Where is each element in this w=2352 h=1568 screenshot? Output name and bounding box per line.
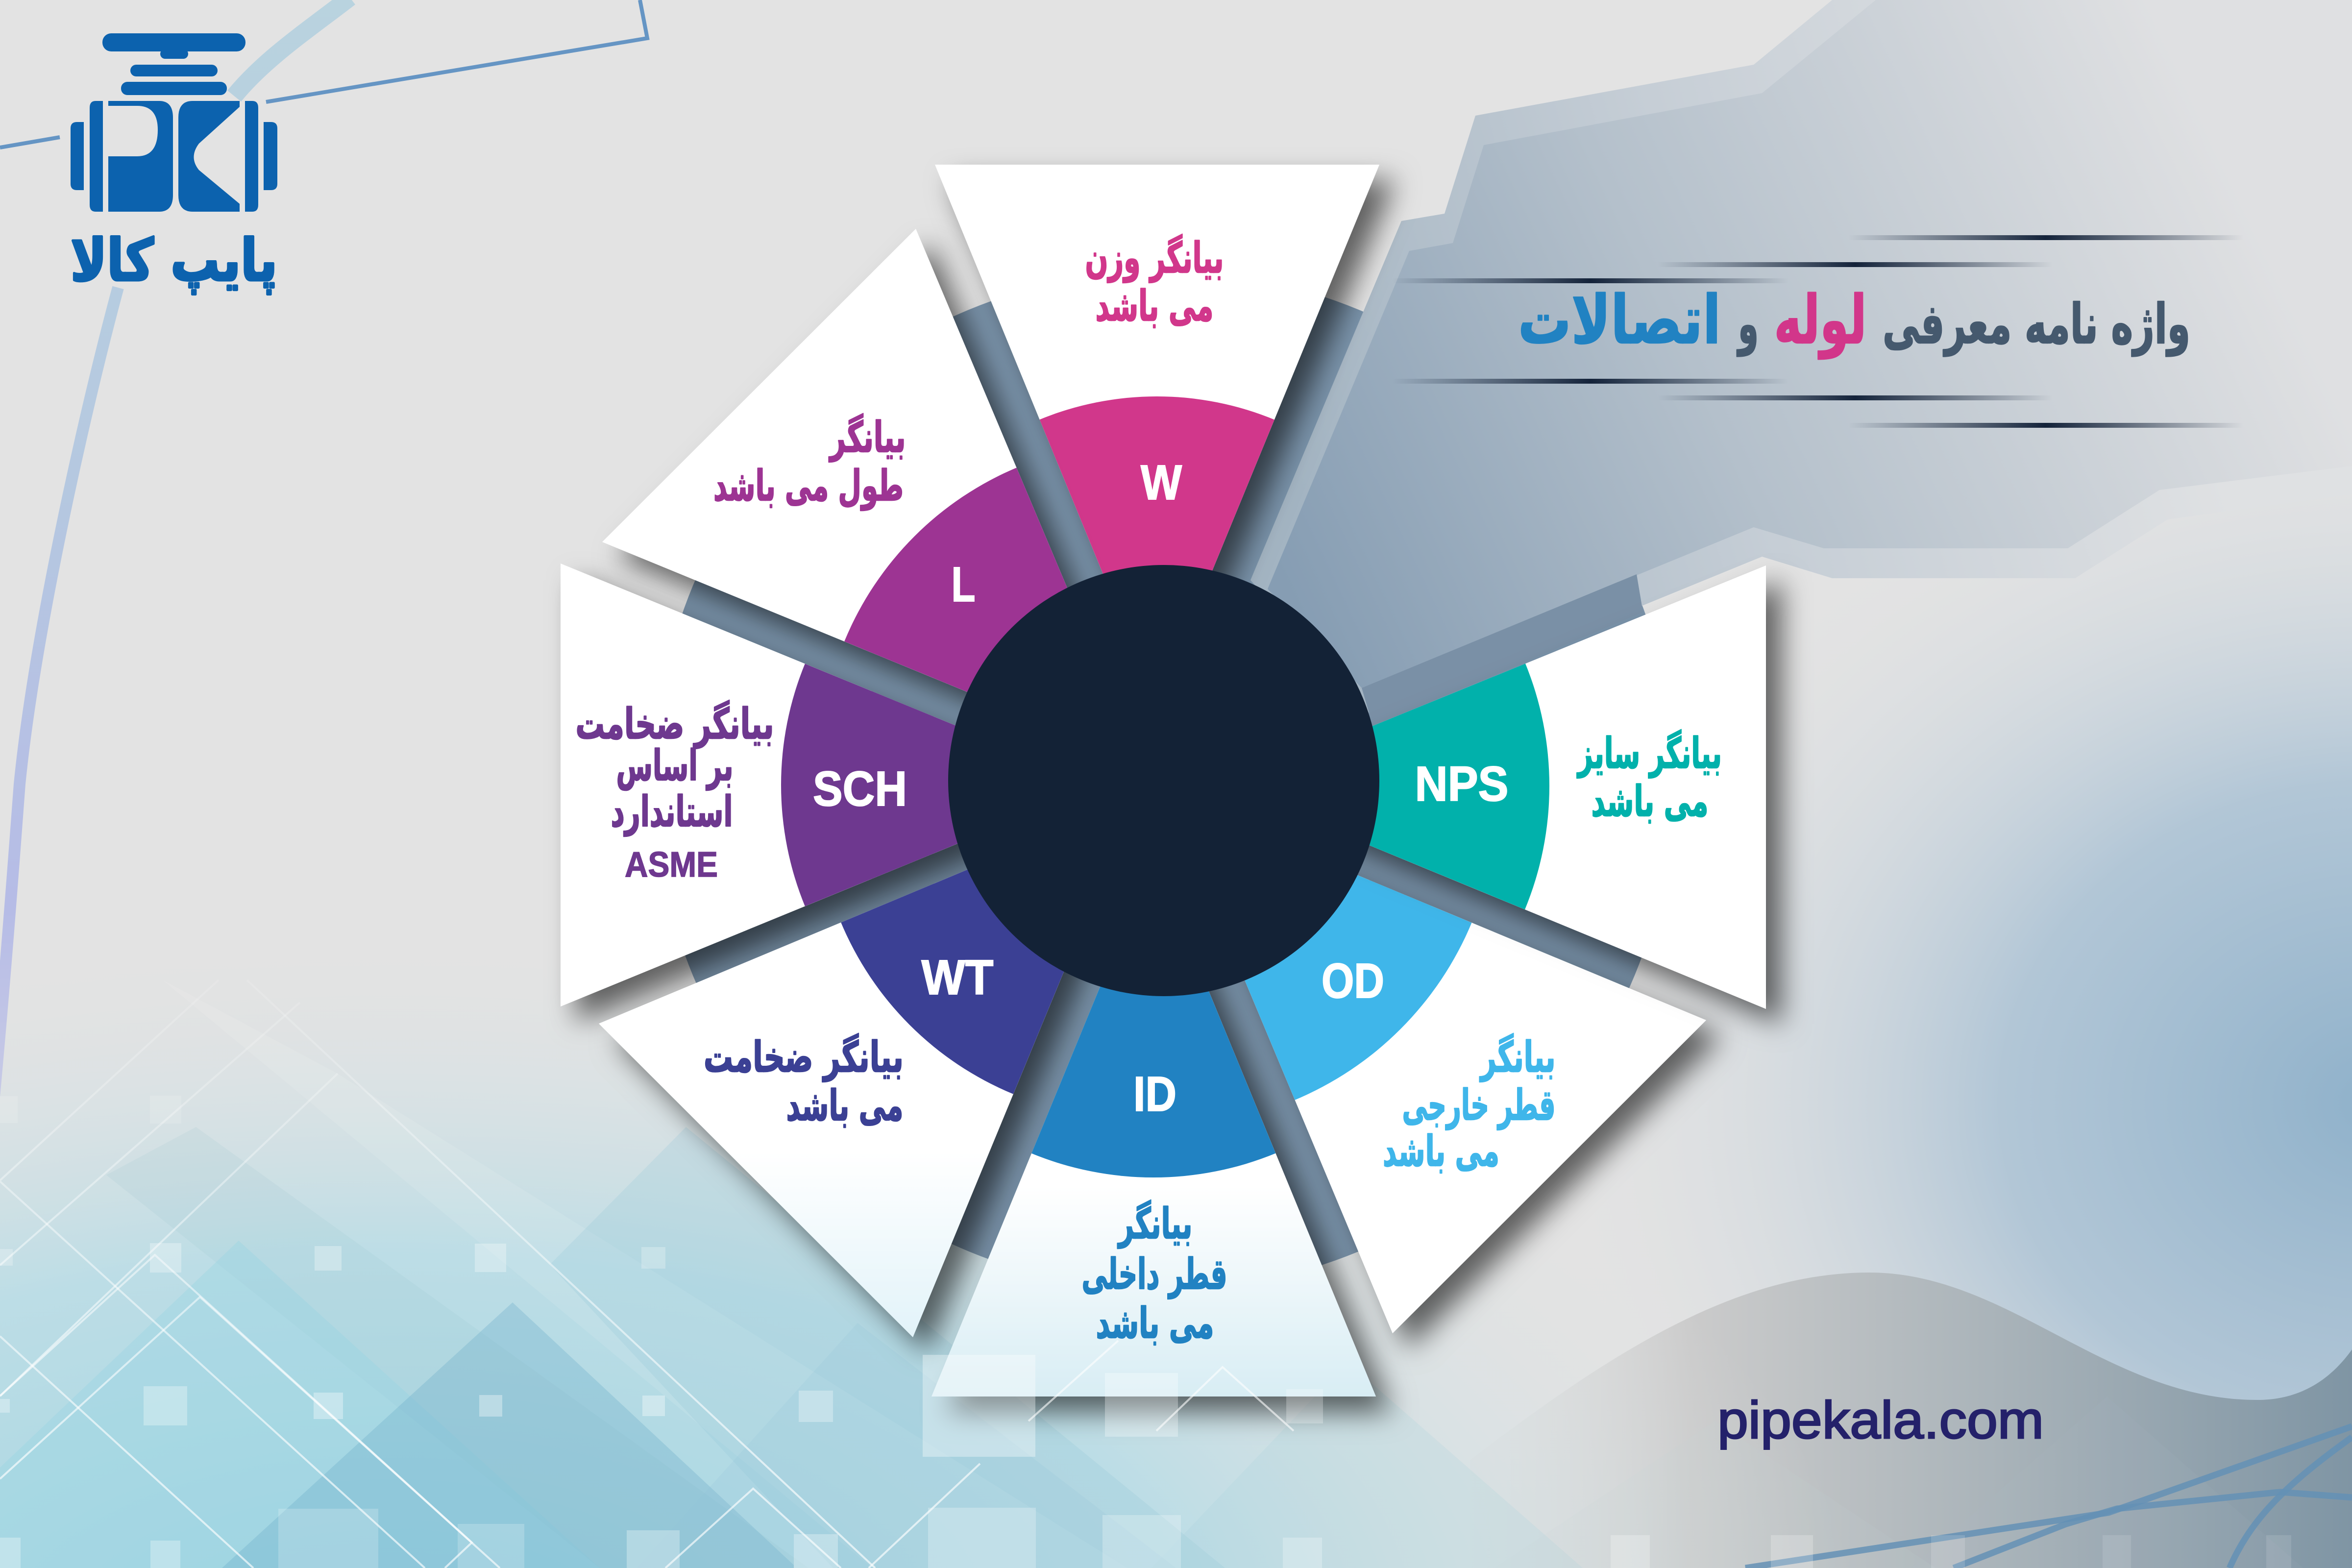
wedge: W: بیانگر وزن — [1085, 234, 1224, 283]
background: wave shape — [1470, 1273, 2352, 1568]
wedge: NPS: NPS — [1415, 757, 1508, 811]
wedge: SCH: استاندارد — [611, 787, 733, 836]
title: اتصالات — [1518, 282, 1721, 359]
wedge: L: طول می باشد — [713, 462, 904, 511]
translucent squares overlay — [0, 1096, 2291, 1568]
wedge: ID — [931, 984, 1404, 1432]
logo: valve body — [71, 101, 277, 212]
wedge: SCH — [557, 564, 967, 1035]
top-left blue outline — [0, 0, 647, 147]
panel lower strip — [1362, 574, 1643, 726]
panel inner — [1268, 0, 2352, 688]
wedge: WT: WT — [921, 950, 994, 1005]
website url: pipekala.com — [1717, 1390, 2044, 1449]
bottom-right blue lines — [1745, 1426, 2352, 1568]
wedge: NPS: می باشد — [1592, 777, 1708, 826]
wedge: SCH: بیانگر ضخامت — [575, 700, 774, 749]
background: geometric diamonds — [0, 980, 2303, 1568]
title: لوله — [1774, 282, 1867, 359]
wedge: OD: بیانگر — [1479, 1033, 1555, 1082]
background: teal glow bottom-left — [0, 931, 1862, 1568]
wedge: L: بیانگر — [829, 413, 906, 462]
wedge: OD — [1237, 867, 1732, 1359]
wedge: ID: بیانگر — [1117, 1200, 1193, 1249]
title decorative lines — [1392, 235, 2243, 428]
wedge: WT: می باشد — [786, 1081, 904, 1130]
title — [1518, 282, 2190, 359]
wedge: SCH: ASME — [625, 845, 718, 884]
panel outer band — [1250, 0, 2352, 716]
logo: valve handle — [102, 33, 245, 95]
logo — [71, 33, 277, 294]
wedge: NPS: بیانگر سایز — [1576, 729, 1722, 778]
wedge: ID: قطر داخلی — [1082, 1250, 1227, 1299]
wedge: ID: می باشد — [1096, 1299, 1214, 1348]
wedge: WT: بیانگر ضخامت — [704, 1033, 904, 1082]
wedge: W: W — [1141, 455, 1182, 510]
wedge: SCH: SCH — [813, 761, 907, 816]
title: و — [1737, 293, 1759, 357]
wedge: W: می باشد — [1096, 282, 1213, 331]
wedge: OD: OD — [1322, 954, 1384, 1008]
wedge: SCH: بر اساس — [616, 741, 733, 790]
wedge: OD: می باشد — [1383, 1127, 1499, 1176]
top-left curve — [0, 0, 350, 1107]
wedge: W — [935, 161, 1408, 582]
logo: wordmark: پایپ کالا — [71, 226, 277, 294]
wedge: NPS — [902, 462, 1766, 1110]
white lines over ID wedge — [1029, 1341, 1294, 1431]
title: واژه نامه معرفی — [1883, 293, 2190, 357]
center circle — [948, 565, 1379, 996]
title panel background — [1250, 0, 2352, 726]
wedge: WT — [599, 869, 1100, 1363]
strip ring behind wedges — [654, 271, 1673, 1290]
wedge: L — [602, 229, 1091, 716]
background: blue glow right — [1470, 343, 2352, 1568]
wedge: OD: قطر خارجی — [1402, 1081, 1555, 1130]
wedge: ID: ID — [1133, 1067, 1176, 1122]
wedge: L: L — [952, 557, 975, 612]
background: thin white lines — [0, 980, 980, 1568]
